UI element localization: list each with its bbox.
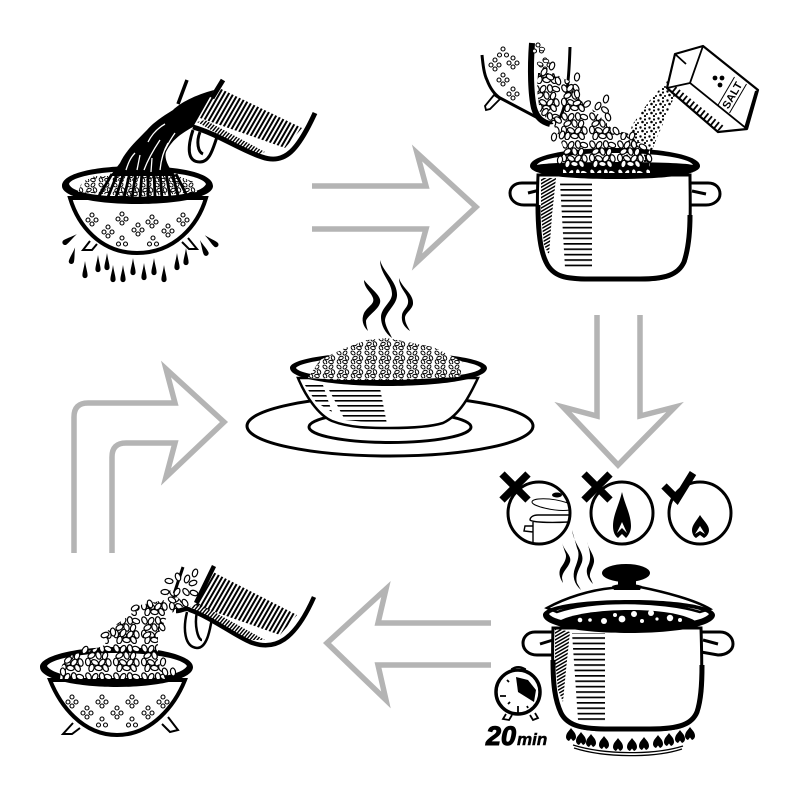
step 3: boiling pot on burner bbox=[523, 530, 733, 756]
arrow: step 2 to step 3 bbox=[563, 315, 675, 465]
colander holes bbox=[66, 695, 169, 727]
pot base shading bbox=[538, 205, 690, 279]
bowl body bbox=[298, 378, 478, 428]
rice heap bbox=[308, 338, 463, 380]
falling rice bbox=[537, 47, 653, 173]
pouring rice bbox=[60, 568, 199, 679]
handles bbox=[523, 632, 733, 655]
arrow: step 3 to step 4 bbox=[327, 589, 491, 700]
step 2: adding rice and salt to pot bbox=[482, 43, 758, 280]
rice in colander bbox=[78, 176, 197, 197]
pot hatching bbox=[555, 628, 605, 722]
steam bbox=[363, 260, 413, 338]
bowl hatching bbox=[303, 382, 387, 424]
colander feet bbox=[83, 238, 197, 250]
burner flames bbox=[566, 727, 695, 751]
burner base bbox=[573, 745, 683, 756]
icon: do not leave lid off bbox=[502, 474, 570, 544]
colander rim bbox=[62, 166, 213, 204]
icon: low flame approved bbox=[664, 473, 731, 544]
step 3: icons for heat level bbox=[502, 473, 731, 544]
pot handles bbox=[510, 183, 720, 205]
step 1: rinsing rice in colander bbox=[61, 80, 317, 282]
colander feet bbox=[63, 717, 178, 734]
steam bbox=[559, 530, 594, 590]
pot rim bbox=[543, 600, 715, 633]
plate inner bbox=[309, 412, 471, 442]
icon: high flame forbidden bbox=[584, 474, 653, 544]
duration label: 20min bbox=[485, 721, 547, 751]
salt stream bbox=[625, 80, 678, 172]
pot hatching bbox=[541, 178, 592, 270]
pot body bbox=[537, 175, 690, 280]
pot rim and water bbox=[530, 148, 700, 179]
plate outer bbox=[247, 396, 533, 456]
boiling water bbox=[557, 610, 697, 632]
colander rim bbox=[40, 647, 193, 687]
arrow: step 4 to serving bbox=[74, 369, 224, 553]
tilted colander bbox=[482, 43, 570, 124]
pot base bbox=[553, 660, 702, 729]
water stream bbox=[99, 90, 214, 198]
salt label: SALT bbox=[720, 80, 745, 111]
pouring pot body bbox=[193, 80, 317, 159]
pouring pan body bbox=[176, 566, 315, 645]
colander bowl bbox=[70, 198, 206, 253]
lid bbox=[547, 587, 710, 612]
bowl rim bbox=[290, 352, 487, 386]
clock bbox=[496, 667, 540, 720]
water drips bbox=[61, 232, 220, 282]
bubbles bbox=[578, 610, 682, 624]
colander bowl bbox=[50, 680, 185, 735]
timer: 20 minutes bbox=[485, 667, 547, 751]
pouring pot handle bbox=[178, 80, 187, 104]
colander holes bbox=[86, 212, 189, 246]
pan handle loop bbox=[185, 612, 212, 648]
check mark bbox=[664, 473, 693, 499]
cross mark bbox=[584, 474, 610, 500]
pot body bbox=[553, 628, 702, 730]
cross mark bbox=[502, 474, 528, 500]
step 4: draining rice bbox=[40, 566, 315, 735]
serving: bowl of rice on plate bbox=[247, 260, 533, 456]
lid knob bbox=[602, 564, 650, 590]
handle of pan bbox=[173, 567, 183, 597]
arrow: step 1 to step 2 bbox=[312, 153, 476, 262]
salt box bbox=[667, 46, 758, 132]
